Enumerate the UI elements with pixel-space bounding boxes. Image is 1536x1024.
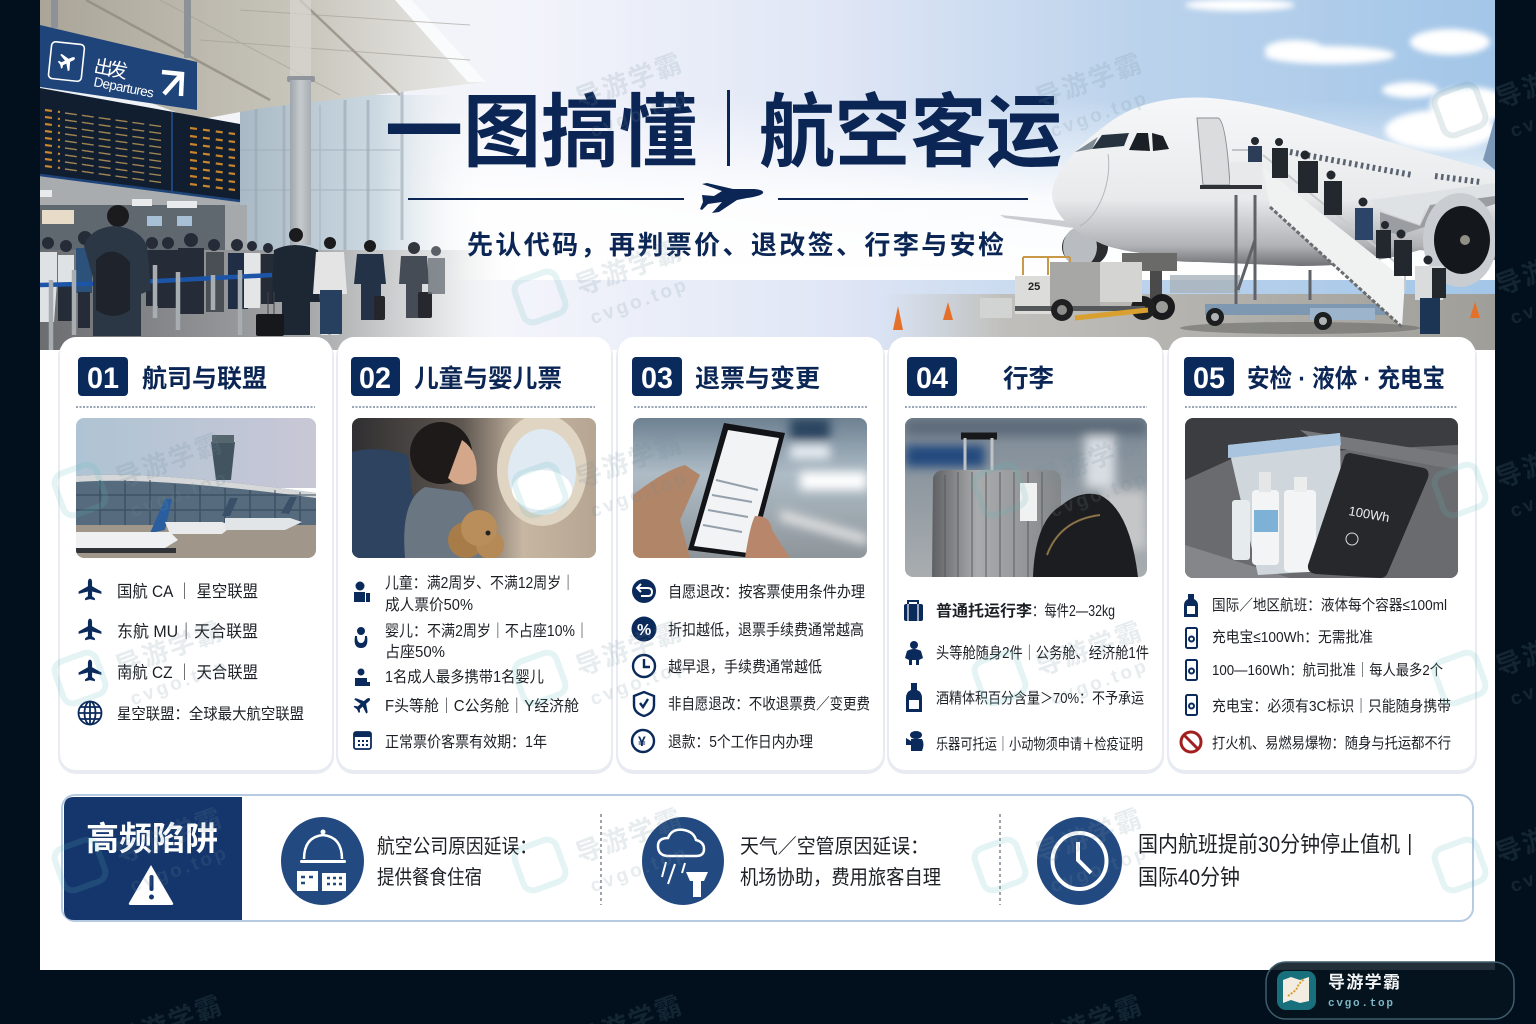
- list: child and infant rules: F头等舱｜C公务舱｜Y经济舱: [385, 697, 579, 715]
- number badge 02: [351, 357, 400, 396]
- icon: suitcase: [904, 600, 923, 621]
- panel: 02 child and infant tickets: [336, 337, 613, 774]
- heading: 行李: [1003, 365, 1054, 393]
- number badge 05: 05: [1193, 362, 1225, 395]
- list: refund rules: 退款：5个工作日内办理: [668, 733, 813, 751]
- ground service truck: [980, 257, 1148, 321]
- brand badge: 导游学霸: [1328, 972, 1400, 992]
- icon: percent: %: [637, 622, 651, 639]
- watermark layer: 导游学霸: [112, 802, 227, 869]
- number badge 01: [78, 357, 128, 396]
- icon: meal and hotel: [281, 817, 364, 905]
- clouds: [1185, 0, 1510, 150]
- number badge 03: 03: [641, 362, 673, 395]
- icon: bottle: [1184, 594, 1198, 617]
- icon: percent: [632, 616, 656, 642]
- watermark layer: cvgo.top: [128, 842, 232, 897]
- watermark layer: cvgo.top: [1048, 87, 1152, 142]
- list: child and infant rules: 成人票价50%: [385, 596, 473, 614]
- list: security rules: 打火机、易燃易爆物：随身与托运都不行: [1212, 734, 1451, 752]
- watermark layer: 导游学霸: [1032, 47, 1147, 114]
- title: [385, 88, 1062, 177]
- list: baggage rules: 乐器可托运｜小动物须申请＋检疫证明: [936, 736, 1143, 753]
- trap 2: weather delay: [642, 817, 941, 905]
- trap 3: check-in deadline: 国际40分钟: [1138, 865, 1240, 890]
- photo: phone in hands: [633, 418, 867, 558]
- list: airlines: 南航 CZ ｜ 天合联盟: [117, 663, 258, 682]
- icon: prohibited: [1181, 732, 1201, 752]
- icon: shield check: [634, 692, 654, 716]
- trap 3: check-in deadline: [1037, 817, 1410, 905]
- boarding passengers: [1248, 137, 1446, 334]
- icon: yen: ¥: [638, 733, 646, 749]
- list: child and infant rules: 占座50%: [385, 643, 445, 661]
- list: baggage rules: 酒精体积百分含量＞70%：不予承运: [936, 690, 1144, 707]
- white fade behind title: [450, 111, 1495, 280]
- watermark layer: cvgo.top: [1048, 467, 1152, 522]
- photo: security tray with liquids and power bank: 100Wh: [1347, 503, 1391, 525]
- stanchion rope: [40, 265, 272, 350]
- subtitle: 先认代码，再判票价、退改签、行李与安检: [467, 230, 1004, 260]
- foreground traveller with backpack: [84, 205, 151, 336]
- trap label block: [64, 797, 242, 920]
- number badge 03: [632, 357, 682, 396]
- watermark layer: 导游学霸: [572, 427, 687, 494]
- icon: plane: [79, 660, 101, 681]
- list: airlines: 国航 CA ｜ 星空联盟: [117, 582, 258, 601]
- icon: liquor bottle: [906, 683, 922, 712]
- list: airlines: [78, 579, 304, 724]
- trap 2: weather delay: 机场协助，费用旅客自理: [740, 866, 941, 889]
- list: baggage rules: ：每件2—32kg: [1032, 602, 1115, 620]
- watermark layer: 导游学霸: [572, 802, 687, 869]
- list: baggage rules: 普通托运行李: [936, 601, 1033, 620]
- photo: suitcase and backpack: [905, 418, 1147, 577]
- watermark layer: 导游学霸: [572, 47, 687, 114]
- watermark layer: cvgo.top: [588, 87, 692, 142]
- panel: high-frequency traps: [62, 795, 1473, 921]
- boarding stairs truck: [1180, 118, 1420, 334]
- watermark layer: 导游学霸: [112, 427, 227, 494]
- watermark layer: 导游学霸: [572, 234, 687, 301]
- watermark layer: 导游学霸: [572, 615, 687, 682]
- heading: 退票与变更: [695, 365, 820, 393]
- icon: rain cloud and tower: [642, 817, 724, 905]
- icon: infant: [355, 627, 367, 648]
- ground service truck: 25: [1028, 281, 1040, 293]
- icon: person: [905, 641, 923, 665]
- watermark layer: 导游学霸: [112, 615, 227, 682]
- icon: return: [632, 579, 656, 603]
- watermark layer: cvgo.top: [128, 467, 232, 522]
- watermark layer: 导游学霸: [1032, 427, 1147, 494]
- icon: child and adult: [354, 582, 370, 602]
- trap 2: weather delay: 天气／空管原因延误：: [740, 835, 929, 858]
- number badge 02: 02: [359, 362, 391, 395]
- list: security rules: 充电宝≤100Wh：无需批准: [1212, 629, 1373, 646]
- heading: 儿童与婴儿票: [414, 365, 562, 393]
- number badge 05: [1184, 357, 1234, 396]
- departures sign: Departures: [92, 74, 155, 101]
- title: 航空客运: [759, 88, 1062, 177]
- hero photo banner: [40, 0, 1510, 350]
- list: refund rules: [632, 579, 870, 752]
- heading: 航司与联盟: [142, 365, 267, 393]
- watermark layer: 导游学霸: [1032, 615, 1147, 682]
- terminal column: [287, 0, 315, 245]
- terminal windows: [240, 92, 444, 250]
- list: refund rules: 折扣越低，退票手续费通常越高: [668, 621, 864, 639]
- list: security rules: 国际／地区航班：液体每个容器≤100ml: [1212, 597, 1447, 614]
- title: 一图搞懂: [385, 88, 697, 177]
- list: child and infant rules: 1名成人最多携带1名婴儿: [385, 668, 544, 686]
- terminal ceiling: [40, 0, 486, 120]
- photo: security tray with liquids and power bank: [1185, 418, 1458, 578]
- list: child and infant rules: [350, 573, 589, 751]
- icon: globe: [78, 702, 102, 724]
- list: security rules: [1181, 594, 1451, 752]
- icon: clock: [633, 655, 655, 677]
- photo: airport terminal with tower: [76, 418, 316, 558]
- watermark layer: cvgo.top: [588, 467, 692, 522]
- watermark layer: cvgo.top: [1048, 842, 1152, 897]
- trap 1: airline delay: [281, 817, 537, 905]
- icon: plane: [79, 619, 101, 640]
- icon: map logo: [1277, 971, 1316, 1010]
- trap 1: airline delay: 提供餐食住宿: [377, 866, 482, 889]
- brand badge: [1266, 962, 1514, 1019]
- photo: child at aircraft window: [352, 414, 596, 559]
- icon: power bank: [1186, 660, 1197, 680]
- icon: clock: [1037, 817, 1122, 905]
- list: airlines: 星空联盟：全球最大航空联盟: [117, 705, 304, 723]
- list: child and infant rules: 儿童：满2周岁、不满12周岁｜: [385, 573, 575, 592]
- watermark layer: cvgo.top: [1048, 655, 1152, 710]
- icon: yen: [632, 730, 654, 752]
- list: refund rules: 越早退，手续费通常越低: [668, 658, 822, 676]
- icon: cabin class plane: [350, 691, 376, 717]
- list: refund rules: 非自愿退改：不收退票费／变更费: [668, 695, 870, 713]
- departures sign: 出发: [92, 55, 130, 83]
- watermark layer: cvgo.top: [588, 274, 692, 329]
- icon: pet and instrument: [906, 731, 924, 751]
- icon: plane: [79, 579, 101, 600]
- walking passengers: [256, 228, 445, 336]
- number badge 04: [907, 357, 957, 396]
- list: child and infant rules: 正常票价客票有效期：1年: [385, 733, 547, 751]
- list: security rules: 充电宝：必须有3C标识｜只能随身携带: [1212, 698, 1451, 715]
- panel: 01 airlines and alliances: [58, 337, 334, 774]
- watermark layer: 导游学霸: [1032, 802, 1147, 869]
- brand badge: cvgo.top: [1328, 998, 1393, 1010]
- trap 1: airline delay: 航空公司原因延误：: [377, 835, 537, 858]
- panel: 05 security, liquids, power banks: [1167, 337, 1477, 774]
- number badge 01: 01: [87, 362, 119, 395]
- list: airlines: 东航 MU｜天合联盟: [117, 622, 258, 641]
- watermark layer: cvgo.top: [128, 655, 232, 710]
- icon: calendar: [354, 732, 371, 749]
- icon: adult with infant: [355, 668, 370, 686]
- check-in wall: [40, 175, 247, 255]
- divider with plane: [408, 183, 1028, 213]
- icon: power bank: [1186, 695, 1197, 715]
- list: child and infant rules: 婴儿：不满2周岁｜不占座10%｜: [385, 622, 589, 640]
- trap label block: 高频陷阱: [86, 820, 218, 857]
- heading: 安检 · 液体 · 充电宝: [1247, 365, 1445, 393]
- panel: 04 baggage: [887, 337, 1164, 774]
- number badge 04: 04: [916, 362, 948, 395]
- queue of passengers: [40, 231, 274, 328]
- watermark layer: cvgo.top: [588, 655, 692, 710]
- distant skyline: [1170, 275, 1240, 293]
- list: baggage rules: 头等舱随身2件｜公务舱、经济舱1件: [936, 644, 1149, 662]
- airliner: [1000, 98, 1497, 320]
- icon: power bank: [1186, 628, 1197, 648]
- watermark layer: cvgo.top: [588, 842, 692, 897]
- concourse floor: [40, 250, 520, 350]
- list: security rules: 100—160Wh：航司批准｜每人最多2个: [1212, 662, 1443, 679]
- panel: 03 refunds and changes: [616, 337, 885, 774]
- departures sign: [40, 25, 197, 110]
- list: refund rules: 自愿退改：按客票使用条件办理: [668, 583, 865, 601]
- flight board: [40, 88, 240, 201]
- list: baggage rules: [904, 600, 1149, 753]
- trap 3: check-in deadline: 国内航班提前30分钟停止值机: [1138, 832, 1400, 857]
- traffic cones: [893, 302, 1480, 330]
- tarmac: [880, 294, 1495, 350]
